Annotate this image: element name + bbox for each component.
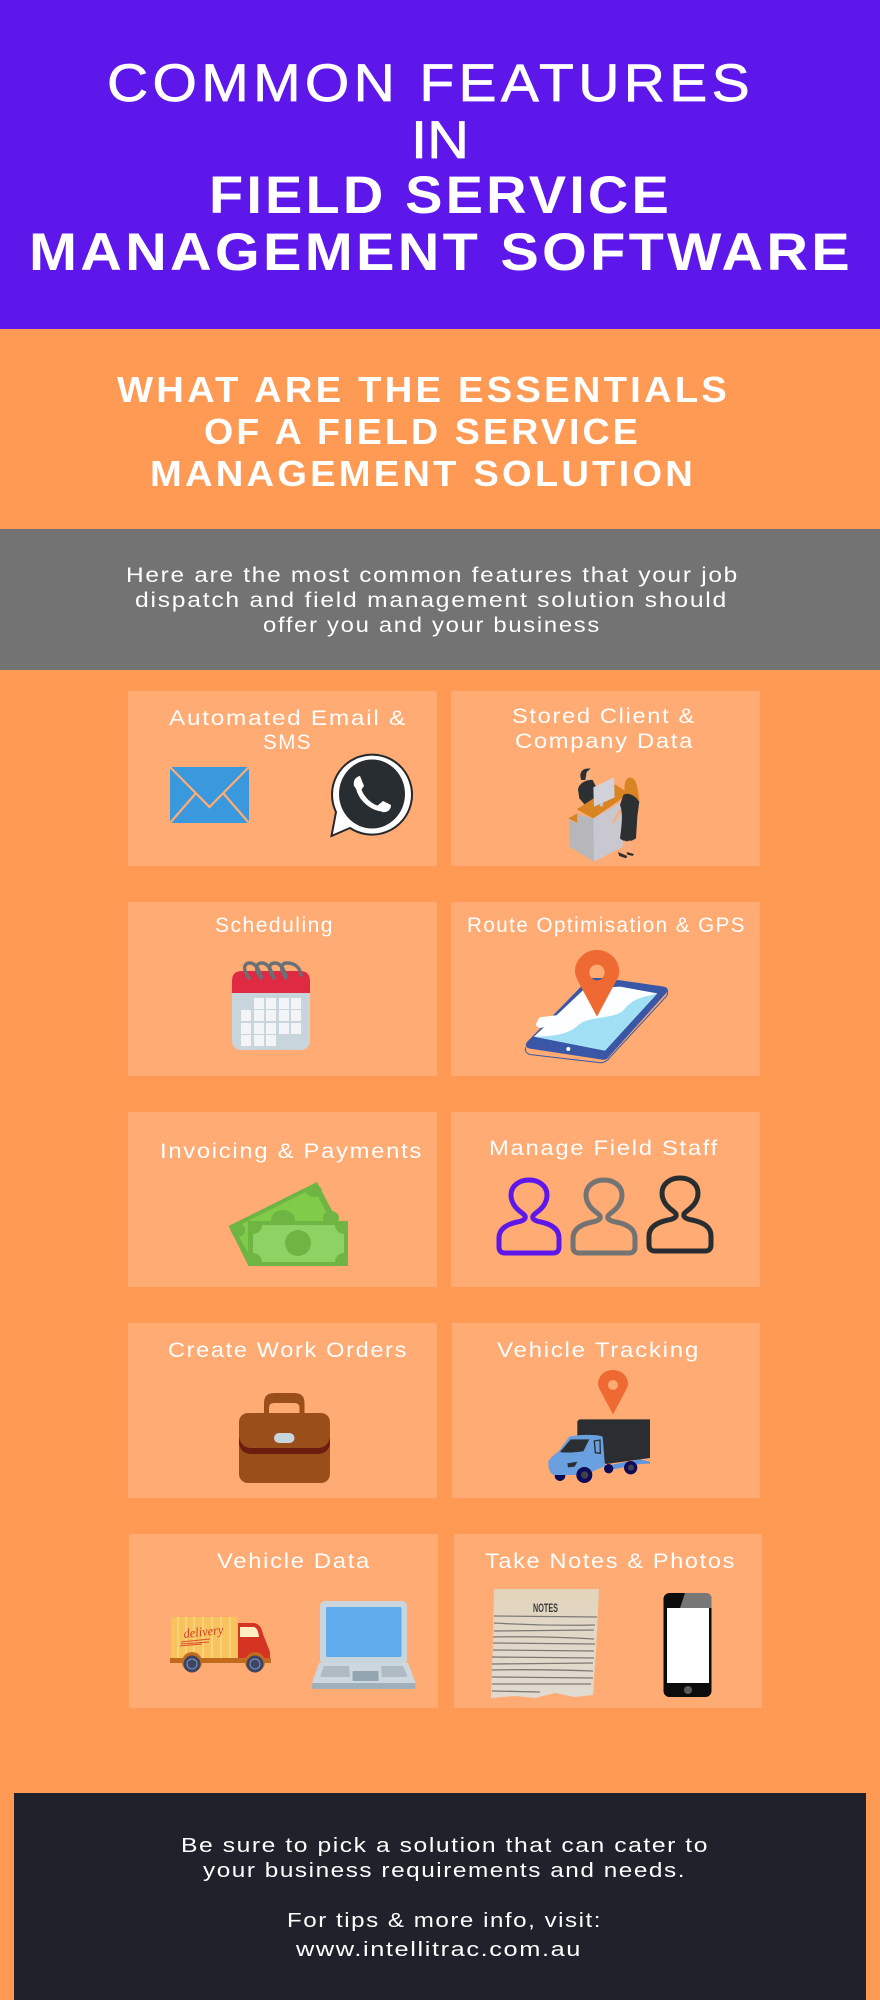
panel: route optimisation and GPS <box>451 902 760 1076</box>
icon: dark person outline <box>649 1178 711 1251</box>
title: IN <box>411 111 469 170</box>
card title: Stored Client & <box>512 705 696 728</box>
heading: essentials: WHAT ARE THE ESSENTIALS <box>117 369 730 410</box>
card title: Take Notes & Photos <box>485 1550 736 1573</box>
icon: grey person outline <box>573 1180 635 1253</box>
panel: vehicle tracking <box>452 1323 760 1498</box>
footer message <box>181 1834 709 1882</box>
icon: tablet with map pin <box>525 950 668 1063</box>
icon: briefcase <box>239 1393 330 1483</box>
intro text: offer you and your business <box>263 614 601 637</box>
intro text: dispatch and field management solution should <box>135 589 728 612</box>
card title: Scheduling <box>215 914 334 937</box>
panel: invoicing and payments <box>128 1112 437 1287</box>
card title: Invoicing & Payments <box>160 1140 423 1163</box>
title: COMMON FEATURES <box>107 54 754 113</box>
heading: essentials: OF A FIELD SERVICE <box>204 411 641 452</box>
card title: Route Optimisation & GPS <box>467 914 746 937</box>
card title: Vehicle Tracking <box>497 1339 700 1362</box>
card title: Manage Field Staff <box>489 1137 719 1160</box>
intro text <box>126 564 739 637</box>
icon: purple person outline <box>499 1180 559 1253</box>
panel: automated email and SMS <box>128 691 437 866</box>
icon: whatsapp bubble <box>332 755 412 836</box>
panel: scheduling <box>128 902 437 1076</box>
card title <box>512 705 696 753</box>
panel: footer call to action <box>14 1793 866 2000</box>
icon: banknotes <box>229 1182 353 1271</box>
footer link <box>287 1909 602 1961</box>
title <box>29 54 853 282</box>
icon: envelope <box>170 767 249 823</box>
icon: laptop <box>312 1601 416 1689</box>
icon: delivery truck <box>170 1617 271 1672</box>
icon: smartphone <box>664 1593 712 1697</box>
intro text: Here are the most common features that your job <box>126 564 739 587</box>
card title: SMS <box>263 731 312 754</box>
footer link: For tips & more info, visit: <box>287 1909 602 1932</box>
icon: calendar <box>232 963 310 1050</box>
card title: Company Data <box>515 730 694 753</box>
card title: Automated Email & <box>169 707 407 730</box>
card title: Vehicle Data <box>217 1550 371 1573</box>
footer link: www.intellitrac.com.au <box>295 1938 582 1961</box>
title: FIELD SERVICE <box>209 166 672 225</box>
panel: stored client and company data <box>451 691 760 866</box>
icon: torn notes page <box>491 1589 599 1698</box>
card title <box>169 707 407 754</box>
panel: intro band <box>0 529 880 670</box>
panel: create work orders <box>128 1323 437 1498</box>
footer message: Be sure to pick a solution that can cater to <box>181 1834 709 1857</box>
icon: truck with location pin <box>548 1370 650 1483</box>
title: MANAGEMENT SOFTWARE <box>29 223 853 282</box>
icon: delivery truck: delivery <box>183 1622 224 1641</box>
footer message: your business requirements and needs. <box>203 1859 686 1882</box>
panel: title banner <box>0 0 880 329</box>
card title: Create Work Orders <box>168 1339 408 1362</box>
panel: manage field staff <box>451 1112 760 1287</box>
heading: essentials: MANAGEMENT SOLUTION <box>150 453 696 494</box>
icon: torn notes page: NOTES <box>533 1603 558 1615</box>
panel: vehicle data <box>129 1534 438 1708</box>
heading: essentials <box>117 369 730 494</box>
panel: take notes and photos <box>454 1534 762 1708</box>
icon: reception desk with two people <box>568 768 639 862</box>
